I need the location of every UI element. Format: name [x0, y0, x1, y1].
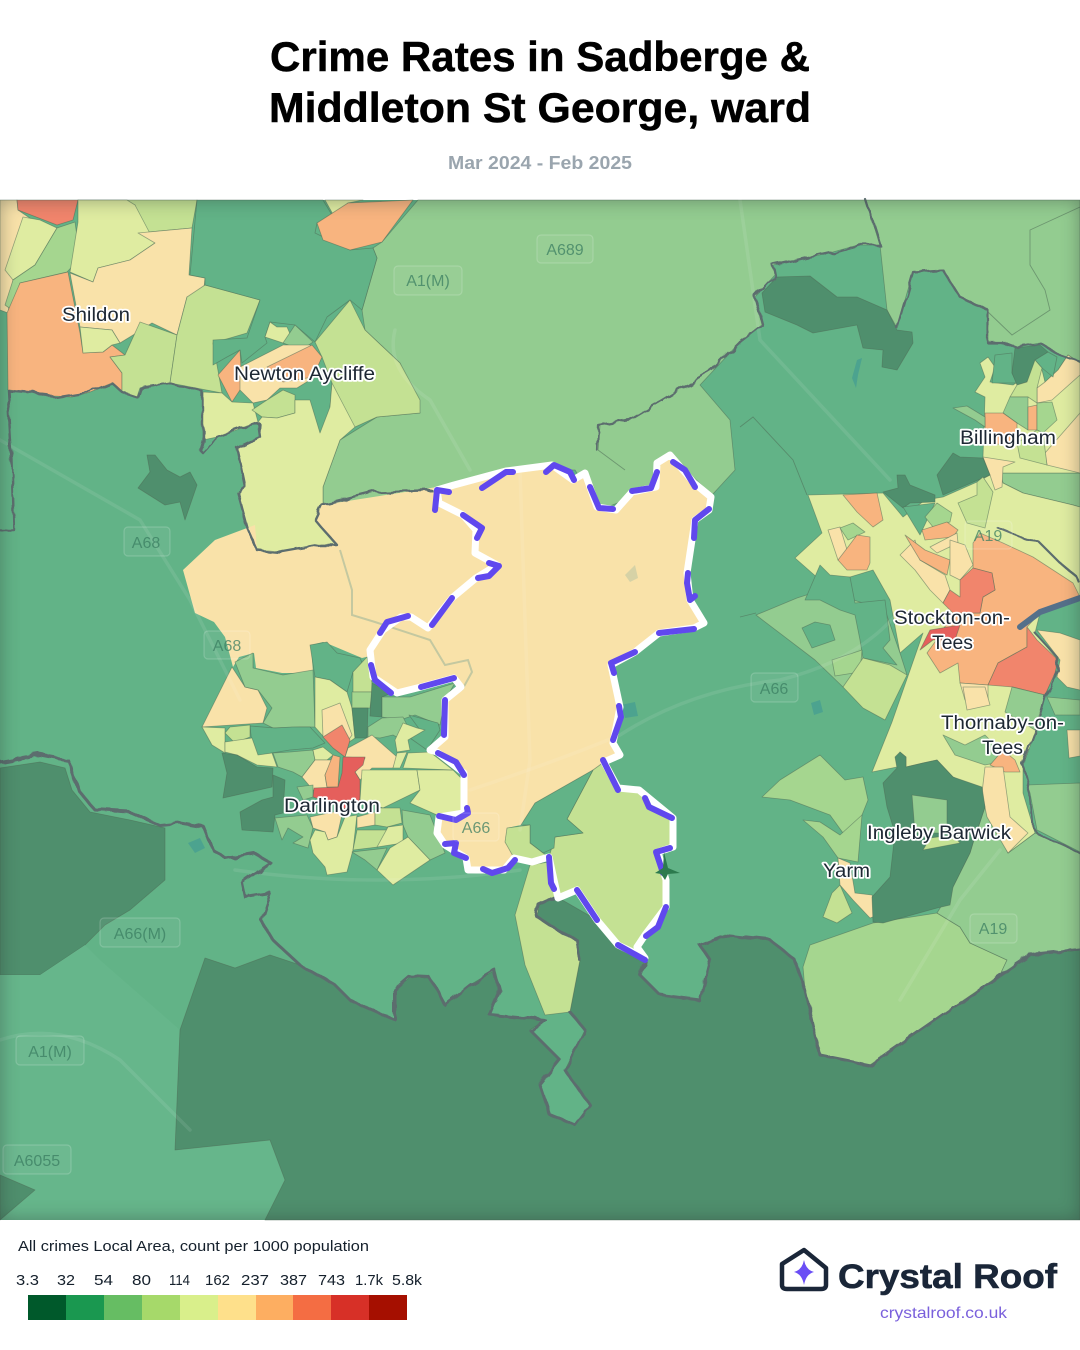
road label A68 north — [124, 527, 170, 556]
label Stockton-on-Tees — [894, 608, 1010, 654]
legend title: All crimes Local Area, count per 1000 population — [18, 1239, 369, 1255]
thin boundary lines — [598, 207, 1080, 617]
legend values: 114 — [169, 1272, 190, 1289]
road label A66 ward: A66 — [462, 820, 490, 837]
label Thornaby-on-Tees: Thornaby-on- — [941, 713, 1064, 734]
road label A66(M) — [100, 918, 180, 947]
road label A66 east: A66 — [760, 681, 788, 698]
map areas: Darlington wards — [183, 487, 510, 885]
icon: house with star — [782, 1250, 826, 1289]
label Darlington: Darlington — [284, 796, 380, 817]
logo: Crystal Roof — [782, 1250, 1058, 1322]
road label A66 east — [751, 673, 798, 702]
road label A19 north: A19 — [974, 528, 1002, 545]
road label A1(M) south — [16, 1036, 84, 1065]
choropleth map — [0, 200, 1080, 1220]
legend values: 54 — [94, 1272, 113, 1289]
map areas: countryside — [0, 200, 1080, 1220]
date range subtitle: Mar 2024 - Feb 2025 — [448, 153, 632, 173]
road label A6055 — [3, 1145, 71, 1174]
label Ingleby Barwick: Ingleby Barwick — [867, 823, 1012, 844]
map areas: north-west towns — [0, 200, 420, 552]
wide river section — [1020, 598, 1080, 627]
website: crystalroof.co.uk — [880, 1305, 1008, 1322]
legend values — [16, 1272, 423, 1289]
road label A66 ward — [453, 813, 499, 841]
small water features — [188, 358, 862, 853]
faint roads — [0, 200, 1000, 1130]
ward boundary: purple dashes — [371, 462, 709, 960]
ward fill: Sadberge and Middleton St George — [370, 455, 711, 1015]
legend values: 743 — [318, 1272, 345, 1289]
label Stockton-on-Tees: Tees — [932, 633, 973, 654]
place labels — [62, 305, 1064, 882]
title: Crime Rates in Sadberge & — [270, 33, 810, 80]
stream inside ward and grey patch — [340, 550, 638, 690]
legend values: 3.3 — [16, 1272, 39, 1289]
label Newton Aycliffe: Newton Aycliffe — [234, 364, 375, 385]
legend values: 32 — [57, 1272, 75, 1289]
label Thornaby-on-Tees — [941, 713, 1064, 759]
legend colour scale — [28, 1295, 407, 1320]
label Thornaby-on-Tees: Tees — [982, 738, 1023, 759]
ward boundary: white outline — [370, 455, 711, 958]
legend values: 387 — [280, 1272, 307, 1289]
road label A66(M): A66(M) — [114, 926, 166, 943]
road label A689 — [537, 235, 593, 263]
road label A19 south: A19 — [979, 921, 1007, 938]
label Stockton-on-Tees: Stockton-on- — [894, 608, 1010, 629]
icon: small dark green tree marker — [655, 852, 680, 880]
legend values: 1.7k — [355, 1272, 383, 1289]
road label A1(M) north — [394, 266, 462, 295]
road label A68 south — [204, 631, 250, 659]
road label A68 north: A68 — [132, 535, 160, 552]
road label A19 north — [965, 521, 1012, 549]
road label A6055: A6055 — [14, 1153, 60, 1170]
map areas: Stockton and Billingham wards — [795, 345, 1080, 853]
map areas: west of Stockton, Ingleby and Yarm — [756, 565, 985, 923]
label Yarm: Yarm — [823, 861, 870, 882]
road label A689: A689 — [546, 242, 584, 259]
legend values: 80 — [132, 1272, 151, 1289]
legend — [16, 1239, 423, 1320]
legend values: 162 — [205, 1272, 230, 1289]
road label A19 south — [970, 914, 1017, 943]
road label A68 south: A68 — [213, 638, 241, 655]
label Shildon: Shildon — [62, 305, 130, 326]
brand name: Crystal Roof — [838, 1258, 1058, 1296]
road label A1(M) north: A1(M) — [406, 273, 450, 290]
thick county and river borders — [0, 200, 1080, 1125]
legend values: 237 — [241, 1272, 269, 1289]
road label A1(M) south: A1(M) — [28, 1044, 72, 1061]
legend values: 5.8k — [392, 1272, 423, 1289]
title: Middleton St George, ward — [269, 84, 811, 131]
title — [269, 33, 811, 131]
road shields — [3, 235, 1017, 1174]
label Billingham: Billingham — [960, 428, 1056, 449]
